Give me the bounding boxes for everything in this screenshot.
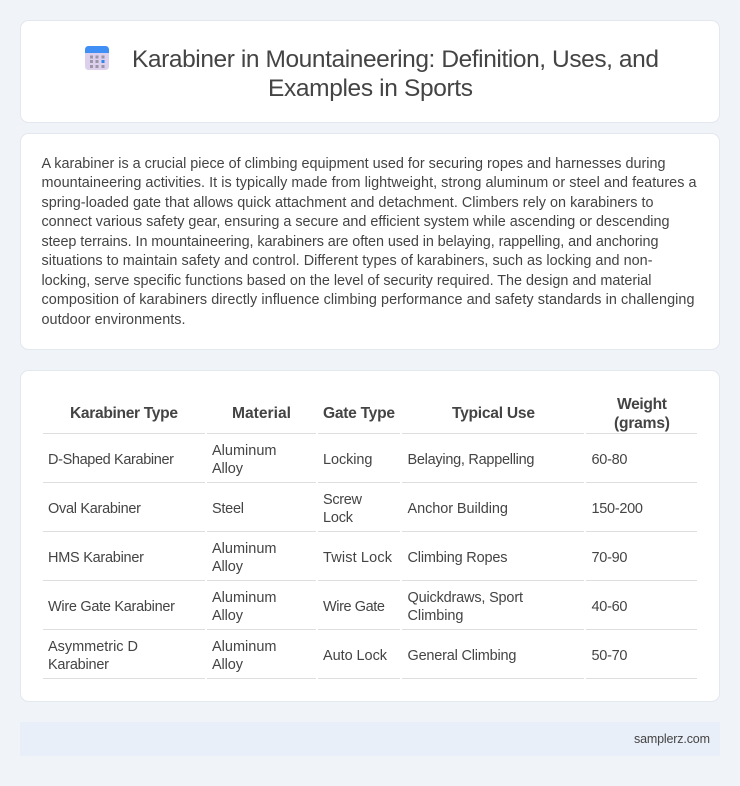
row: Asymmetric D Karabiner bbox=[48, 639, 628, 673]
panel: karabiner table bbox=[20, 370, 720, 702]
row: Wire Gate Karabiner: Quickdraws, Sport bbox=[408, 590, 523, 606]
row: HMS Karabiner: Climbing Ropes bbox=[408, 550, 508, 566]
row: Oval Karabiner: Anchor Building bbox=[408, 501, 508, 517]
row: D-Shaped Karabiner: D-Shaped Karabiner bbox=[48, 452, 174, 468]
footer source text: samplerz.com bbox=[634, 732, 710, 746]
row: HMS Karabiner: Aluminum bbox=[212, 541, 276, 557]
row: D-Shaped Karabiner: Alloy bbox=[212, 461, 244, 477]
paragraph: locking, serve specific functions based on the level of security required. The design and material bbox=[42, 273, 652, 289]
table header: Gate Type bbox=[323, 405, 395, 422]
row: D-Shaped Karabiner bbox=[48, 443, 628, 477]
row: Asymmetric D Karabiner: Asymmetric D bbox=[48, 639, 138, 655]
title bbox=[132, 46, 659, 102]
paragraph: spring-loaded gate that allows quick attachment and detachment. Climbers rely on karabiners to bbox=[42, 195, 654, 211]
row: Wire Gate Karabiner: 40-60 bbox=[592, 599, 628, 615]
row: Oval Karabiner: Lock bbox=[323, 510, 354, 526]
row: Asymmetric D Karabiner: Auto Lock bbox=[323, 648, 388, 664]
paragraph: mountaineering activities. It is typically made from lightweight, strong aluminum or steel and features a bbox=[42, 175, 696, 191]
row: Asymmetric D Karabiner: Karabiner bbox=[48, 657, 109, 673]
paragraph: steep terrains. In mountaineering, karabiners are often used in belaying, rappelling, and anchoring bbox=[42, 234, 658, 250]
title: Examples in Sports bbox=[268, 75, 473, 102]
row: Wire Gate Karabiner: Alloy bbox=[212, 608, 244, 624]
table header: Karabiner Type bbox=[70, 405, 178, 422]
paragraph: connect various safety gear, ensuring a secure and efficient system while ascending or descending bbox=[42, 214, 670, 230]
table header: Weight bbox=[617, 396, 667, 413]
row: Asymmetric D Karabiner: 50-70 bbox=[592, 648, 628, 664]
row: Wire Gate Karabiner: Aluminum bbox=[212, 590, 276, 606]
footer bar bbox=[20, 722, 720, 756]
table header: Typical Use bbox=[452, 405, 535, 422]
row: HMS Karabiner bbox=[48, 541, 628, 575]
panel: definition text bbox=[20, 134, 720, 350]
row: Wire Gate Karabiner: Wire Gate bbox=[323, 599, 385, 615]
row: D-Shaped Karabiner: Locking bbox=[323, 452, 372, 468]
row: Wire Gate Karabiner: Climbing bbox=[408, 608, 464, 624]
row: HMS Karabiner: 70-90 bbox=[592, 550, 628, 566]
row: Oval Karabiner: Oval Karabiner bbox=[48, 501, 141, 517]
row: HMS Karabiner: Twist Lock bbox=[323, 550, 393, 566]
row: Oval Karabiner: 150-200 bbox=[592, 501, 643, 517]
row: HMS Karabiner: HMS Karabiner bbox=[48, 550, 144, 566]
row: Asymmetric D Karabiner: Alloy bbox=[212, 657, 244, 673]
panel: title card bbox=[20, 20, 720, 122]
title: Karabiner in Mountaineering: Definition, Uses, and bbox=[132, 46, 659, 73]
table header: (grams) bbox=[614, 415, 670, 432]
paragraph: A karabiner is a crucial piece of climbing equipment used for securing ropes and harnesses during bbox=[42, 156, 666, 172]
row: Wire Gate Karabiner bbox=[48, 590, 628, 624]
row: Oval Karabiner: Steel bbox=[212, 501, 244, 517]
icon: calendar bbox=[85, 46, 109, 70]
row: Asymmetric D Karabiner: Aluminum bbox=[212, 639, 276, 655]
paragraph: composition of karabiners directly influence climbing performance and safety standards in challenging bbox=[42, 292, 694, 308]
table header bbox=[70, 396, 670, 432]
row: Wire Gate Karabiner: Wire Gate Karabiner bbox=[48, 599, 175, 615]
row: D-Shaped Karabiner: 60-80 bbox=[592, 452, 628, 468]
paragraph bbox=[42, 156, 696, 328]
row: Oval Karabiner: Screw bbox=[323, 492, 363, 508]
paragraph: situations to maintain safety and control. Different types of karabiners, such as locking and non- bbox=[42, 253, 653, 269]
row: Asymmetric D Karabiner: General Climbing bbox=[408, 648, 516, 664]
row: D-Shaped Karabiner: Belaying, Rappelling bbox=[408, 452, 534, 468]
row: D-Shaped Karabiner: Aluminum bbox=[212, 443, 276, 459]
row: HMS Karabiner: Alloy bbox=[212, 559, 244, 575]
row: Oval Karabiner bbox=[48, 492, 643, 526]
paragraph: outdoor environments. bbox=[42, 312, 186, 328]
table header: Material bbox=[232, 405, 291, 422]
